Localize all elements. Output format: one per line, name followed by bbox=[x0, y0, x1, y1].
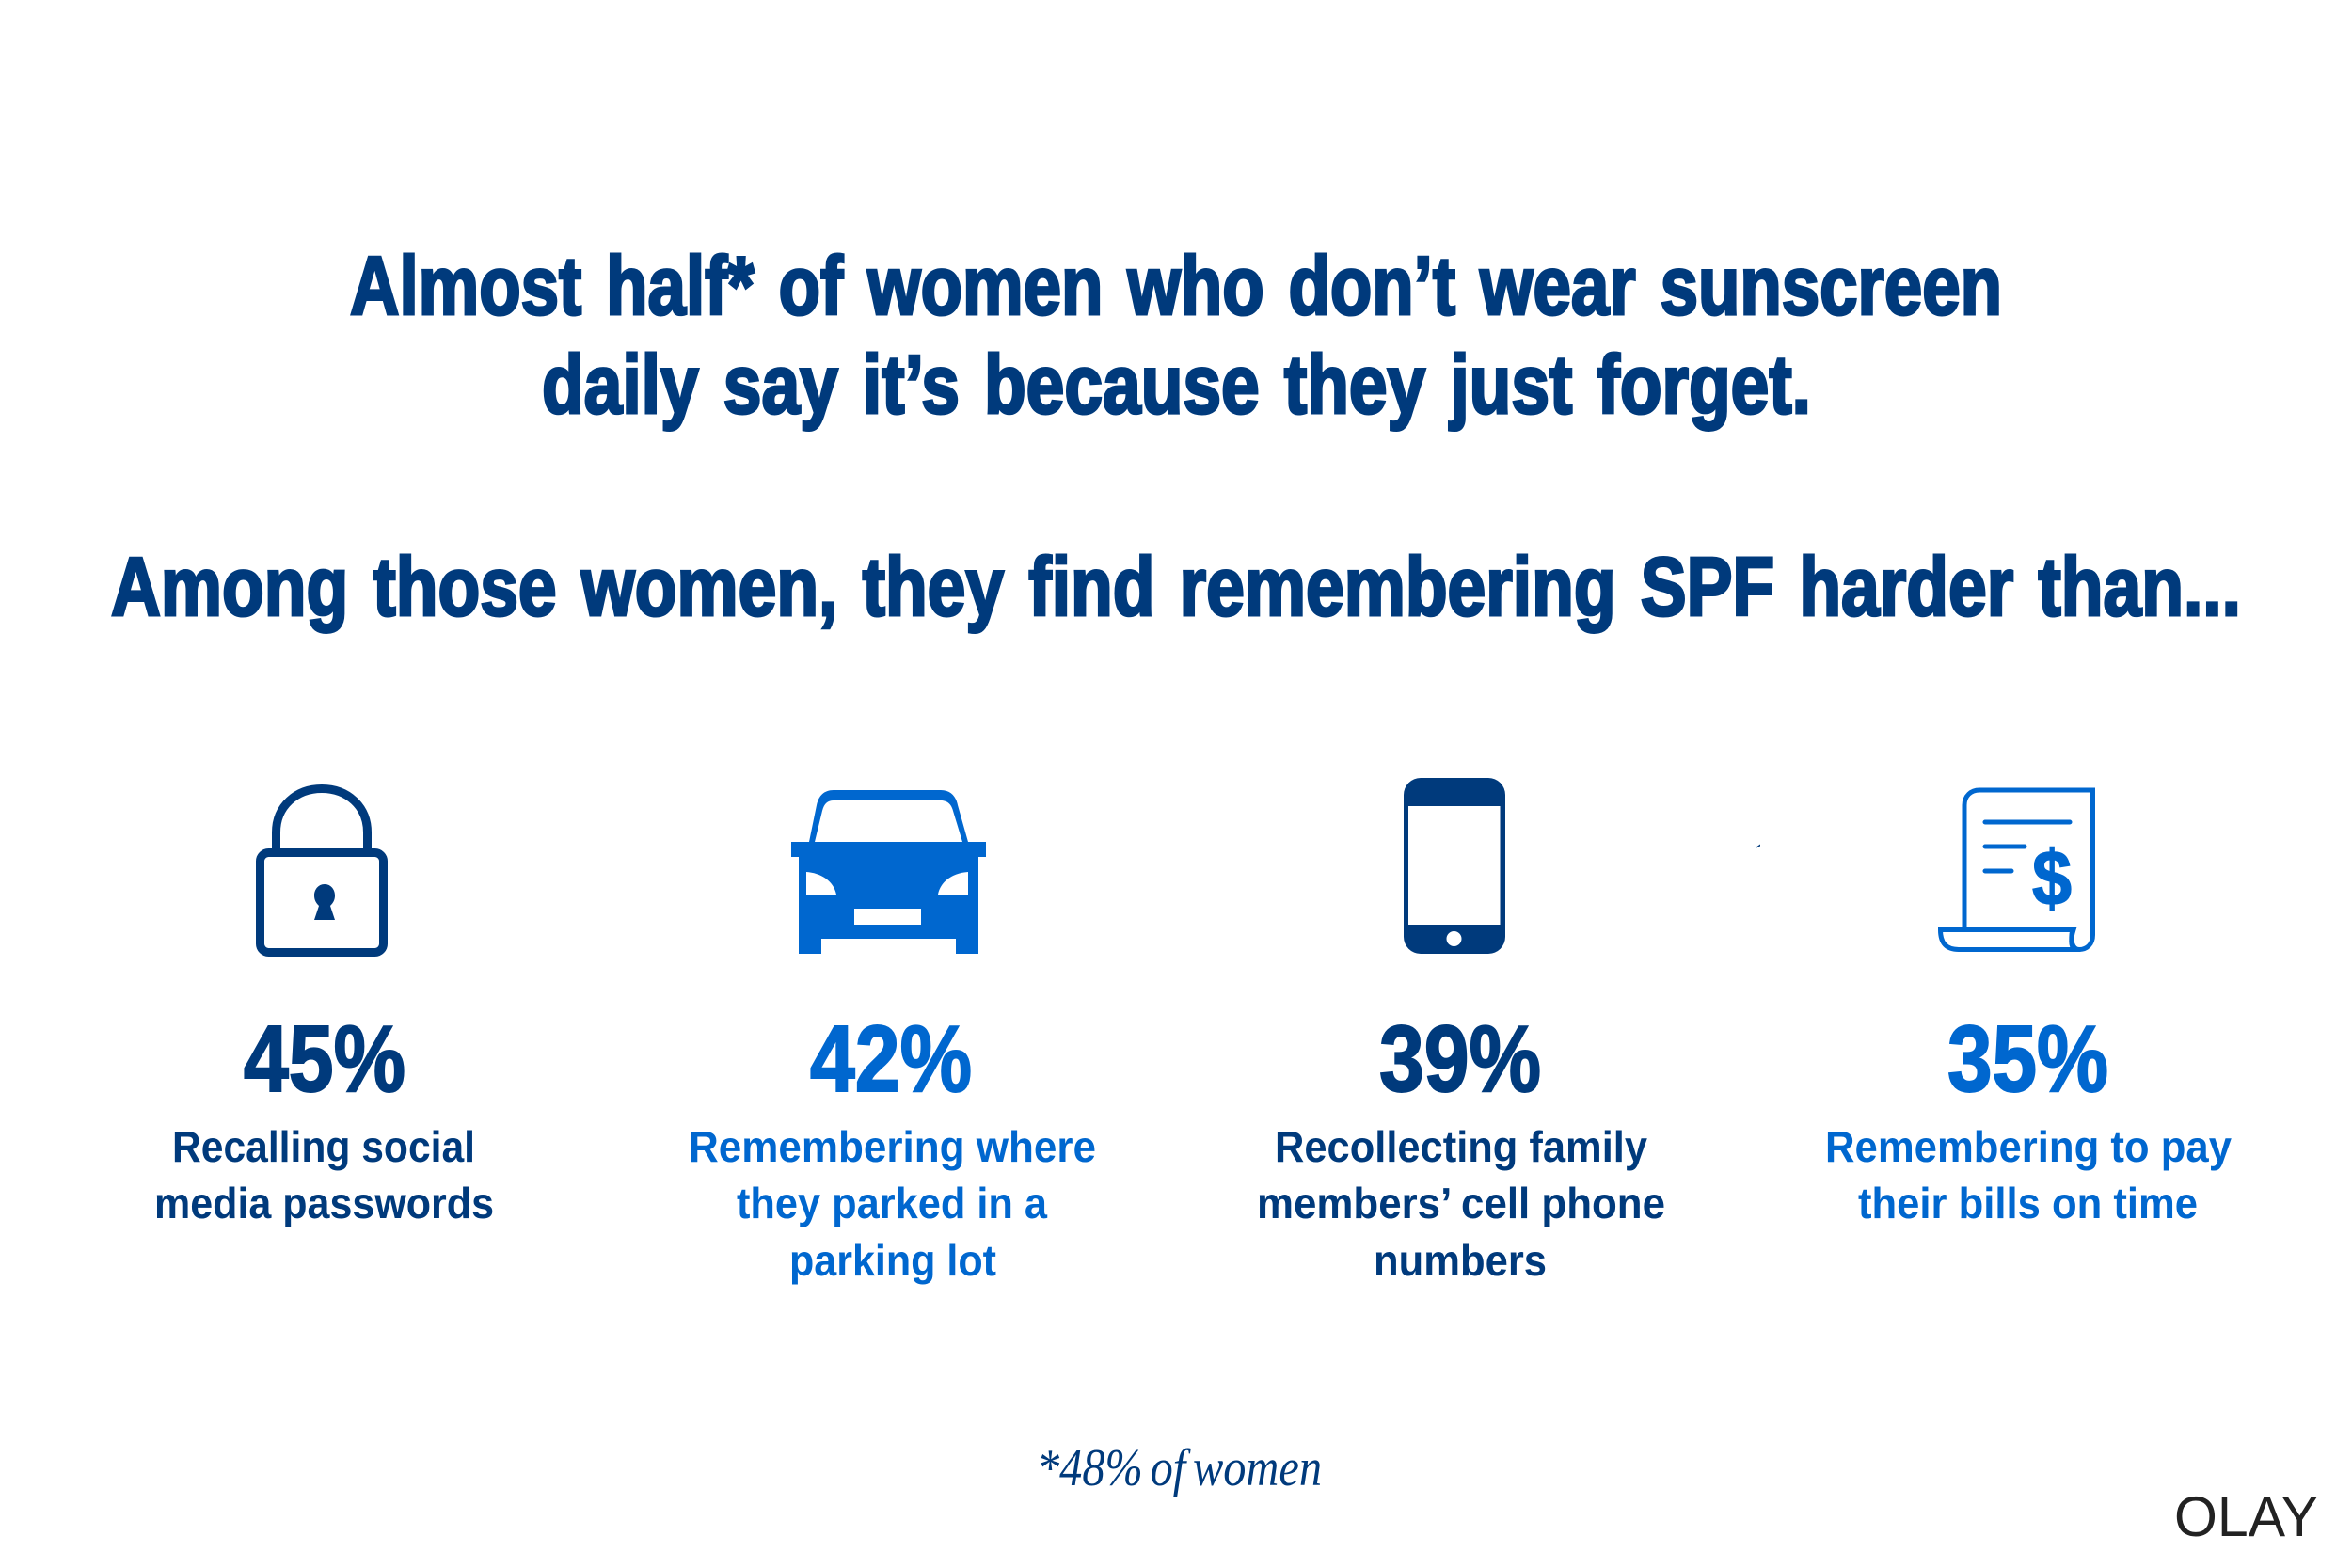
label: parking: Remembering where bbox=[689, 1122, 1096, 1171]
column: bills bbox=[1825, 790, 2232, 1227]
stat: 39%: 39% bbox=[1379, 1006, 1541, 1112]
label: bills: Remembering to pay bbox=[1825, 1122, 2232, 1171]
stat: 35%: 35% bbox=[1947, 1006, 2108, 1112]
footnote: *48% of women bbox=[1037, 1439, 1322, 1497]
title: Almost half* of women who don’t wear sunscreen bbox=[350, 239, 2002, 332]
icon: smartphone bbox=[1404, 778, 1505, 954]
label: phone numbers bbox=[1257, 1122, 1665, 1285]
label: parking: they parked in a bbox=[737, 1179, 1047, 1227]
column: phone numbers bbox=[1257, 778, 1665, 1285]
speck bbox=[1756, 845, 1760, 848]
icon: car bbox=[791, 790, 986, 954]
label: bills: their bills on time bbox=[1858, 1179, 2198, 1227]
title bbox=[350, 239, 2002, 431]
title: daily say it’s because they just forget. bbox=[542, 338, 1811, 431]
icon: bill scroll bbox=[1940, 790, 2092, 950]
label: passwords: Recalling social bbox=[172, 1122, 475, 1171]
label: phone numbers: numbers bbox=[1374, 1236, 1547, 1285]
label: passwords bbox=[154, 1122, 494, 1227]
label: phone numbers: Recollecting family bbox=[1275, 1122, 1647, 1171]
column: parking bbox=[689, 790, 1096, 1285]
label: bills bbox=[1825, 1122, 2232, 1227]
label: parking bbox=[689, 1122, 1096, 1285]
label: passwords: media passwords bbox=[154, 1179, 494, 1227]
label: phone numbers: members’ cell phone bbox=[1257, 1179, 1665, 1227]
stat: 42%: 42% bbox=[810, 1006, 972, 1112]
logo: OLAY: OLAY bbox=[2174, 1485, 2318, 1548]
label: parking: parking lot bbox=[789, 1236, 996, 1285]
icon: padlock bbox=[260, 788, 384, 952]
column: passwords bbox=[154, 788, 494, 1227]
stat: 45%: 45% bbox=[244, 1006, 405, 1112]
icon: bill scroll: $ bbox=[2032, 834, 2072, 922]
